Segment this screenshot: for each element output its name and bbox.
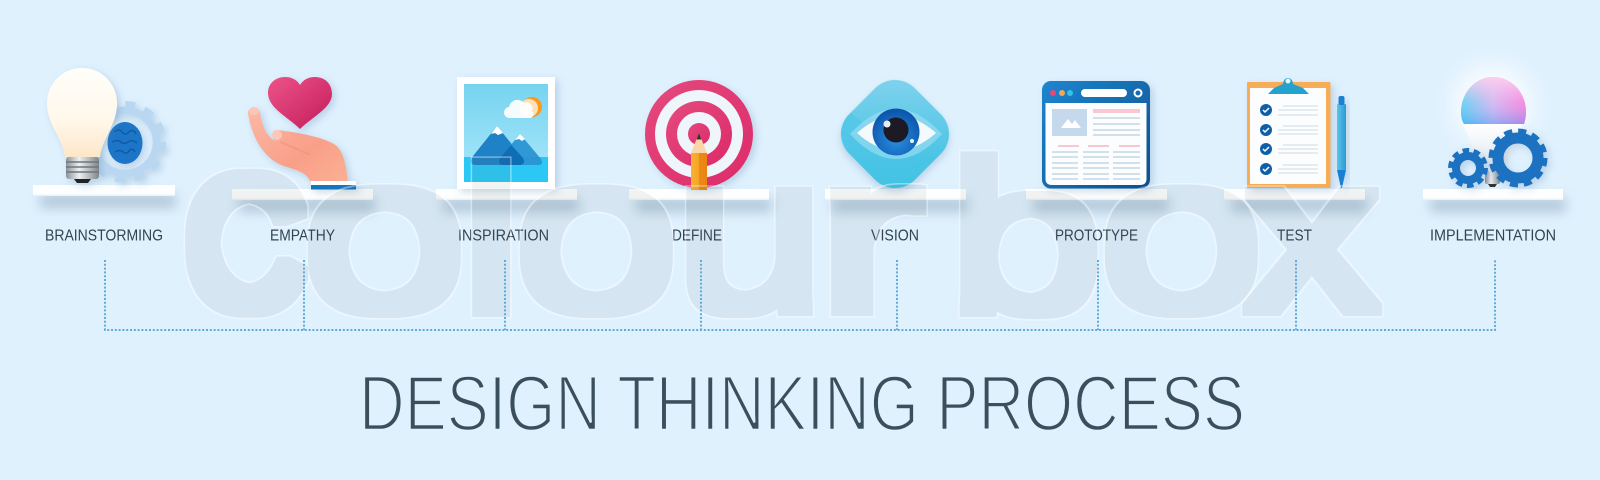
icon: hand	[248, 107, 356, 190]
mountains	[471, 126, 542, 165]
watermark: o	[1099, 109, 1264, 357]
icon: browser window	[1042, 81, 1150, 188]
step: vision	[825, 68, 968, 245]
step: test	[1224, 78, 1367, 244]
shelf	[629, 189, 772, 212]
dotted connector	[105, 260, 1495, 330]
step: empathy	[232, 77, 375, 244]
shelf	[1423, 189, 1566, 212]
shelf	[825, 189, 968, 212]
sun and cloud	[504, 97, 542, 118]
watermark: o	[302, 109, 467, 357]
icon: heart	[268, 77, 332, 129]
shelf	[436, 189, 579, 212]
label: EMPATHY	[270, 228, 335, 244]
icon: large gear	[1492, 132, 1544, 184]
icon: clipboard	[1247, 78, 1330, 188]
icon: pencil	[691, 133, 707, 190]
watermark	[187, 109, 1379, 358]
icon: small gear	[1450, 150, 1486, 186]
shelf	[33, 185, 176, 208]
title: DESIGN THINKING PROCESS	[359, 359, 1245, 447]
watermark: C	[187, 142, 303, 345]
label: IMPLEMENTATION	[1430, 228, 1556, 244]
watermark: r	[814, 109, 925, 357]
icon: gear with brain	[87, 104, 163, 180]
label: BRAINSTORMING	[45, 228, 163, 244]
icon: smart bulb	[1453, 65, 1533, 187]
shelf	[1224, 189, 1367, 212]
label: VISION	[871, 228, 919, 244]
step: implementation	[1423, 65, 1566, 244]
icon: target	[645, 80, 753, 188]
label: DEFINE	[672, 228, 722, 244]
watermark: u	[675, 110, 824, 358]
label: PROTOTYPE	[1055, 228, 1138, 244]
step: define	[629, 80, 772, 244]
shelf	[1026, 189, 1169, 212]
step: inspiration	[436, 77, 579, 244]
watermark: x	[1246, 109, 1379, 357]
step: brainstorming	[33, 68, 176, 244]
shelf	[232, 189, 375, 212]
step: prototype	[1026, 81, 1169, 244]
label: TEST	[1277, 228, 1312, 244]
watermark: b	[948, 120, 1103, 356]
icon: light bulb	[47, 68, 117, 183]
watermark: o	[514, 109, 679, 357]
label: INSPIRATION	[458, 228, 549, 244]
watermark: l	[460, 128, 523, 355]
icon: picture frame	[457, 77, 555, 189]
icon: pen	[1337, 96, 1346, 188]
icon: eye in rounded diamond	[838, 80, 952, 196]
